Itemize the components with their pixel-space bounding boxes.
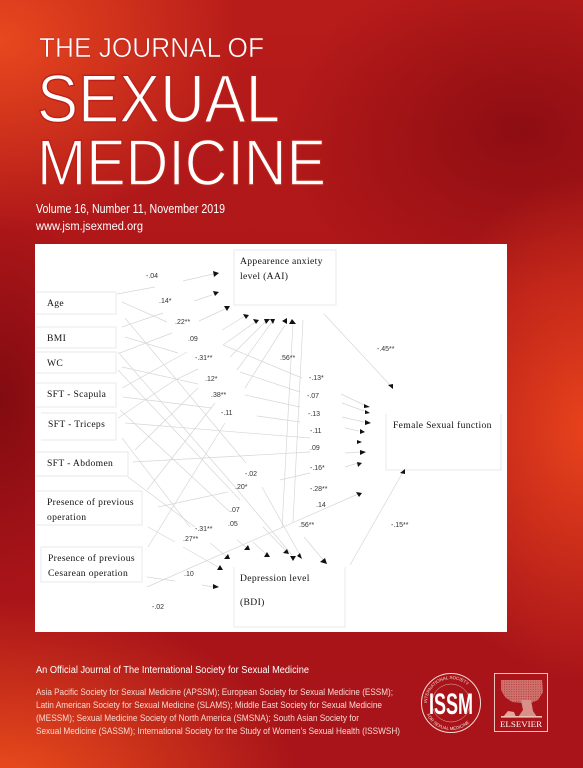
- box labels: WC: [47, 358, 63, 369]
- coefficients: [146, 273, 409, 611]
- coefficients: .12*: [205, 376, 218, 383]
- coefficients: -.16*: [310, 465, 325, 472]
- society affiliations: An Official Journal of The International Society for Sexual Medicine: [36, 665, 309, 676]
- coefficients: -.11: [310, 428, 322, 435]
- coefficients: .20*: [235, 484, 248, 491]
- box labels: SFT - Triceps: [48, 419, 105, 430]
- box labels: BMI: [47, 333, 66, 344]
- coefficients: .09: [188, 336, 198, 343]
- society affiliations: (MESSM); Sexual Medicine Society of North America (SMSNA); South Asian Society for: [36, 713, 359, 723]
- coefficients: .22**: [175, 319, 190, 326]
- coefficients: -.31**: [195, 355, 213, 362]
- box labels: SFT - Abdomen: [47, 458, 113, 469]
- coefficients: -.11: [221, 410, 233, 417]
- coefficients: -.04: [146, 273, 158, 280]
- masthead: journal title: [37, 32, 326, 199]
- coefficients: .27**: [183, 536, 198, 543]
- box labels: Presence of previous: [48, 553, 135, 564]
- coefficients: .07: [230, 507, 240, 514]
- coefficients: .09: [310, 445, 320, 452]
- coefficients: -.13: [308, 411, 320, 418]
- society affiliations: Asia Pacific Society for Sexual Medicine (APSSM); European Society for Sexual Medicine (ESSM);: [36, 687, 393, 697]
- issue details: [35, 202, 225, 233]
- coefficients: -.02: [245, 471, 257, 478]
- issue details: Volume 16, Number 11, November 2019: [36, 202, 225, 216]
- box labels: Depression level: [240, 573, 310, 584]
- coefficients: -.07: [307, 393, 319, 400]
- coefficients: -.31**: [195, 526, 213, 533]
- box labels: SFT - Scapula: [47, 389, 107, 400]
- coefficients: .14*: [159, 298, 172, 305]
- coefficients: .38**: [211, 392, 226, 399]
- coefficients: .14: [316, 502, 326, 509]
- coefficients: .05: [228, 521, 238, 528]
- logo: Elsevier: [494, 674, 548, 732]
- box labels: Cesarean operation: [48, 568, 128, 579]
- coefficients: -.45**: [377, 346, 395, 353]
- society affiliations: [36, 665, 400, 736]
- society affiliations: Latin American Society for Sexual Medicine (SLAMS); Middle East Society for Sexual Medicine: [36, 700, 382, 710]
- box labels: (BDI): [240, 597, 265, 608]
- icon: elsevier tree: [501, 680, 543, 718]
- box labels: level (AAI): [240, 271, 288, 282]
- logo: ISSM: INTERNATIONAL SOCIETY: [424, 676, 469, 703]
- box labels: [47, 256, 492, 608]
- box labels: Appearence anxiety: [240, 256, 323, 267]
- coefficients: -.15**: [391, 522, 409, 529]
- logo: ISSM: FOR SEXUAL MEDICINE: [426, 714, 470, 730]
- coefficients: .10: [184, 571, 194, 578]
- masthead: journal title: THE JOURNAL OF: [39, 32, 264, 63]
- box labels: Female Sexual function: [393, 420, 492, 431]
- coefficients: .56**: [280, 355, 295, 362]
- box labels: operation: [47, 512, 86, 523]
- issue details: www.jsm.jsexmed.org: [35, 221, 143, 233]
- society affiliations: Sexual Medicine (SASSM); International Society for the Study of Women’s Sexual Health (ISSWSH): [36, 726, 400, 736]
- logo: ISSM: ISSM: [429, 688, 473, 721]
- masthead: journal title: MEDICINE: [37, 126, 326, 199]
- coefficients: .56**: [299, 522, 314, 529]
- coefficients: -.28**: [310, 486, 328, 493]
- coefficients: -.13*: [309, 375, 324, 382]
- logo: ISSM: [421, 673, 481, 733]
- path lines: [117, 274, 403, 587]
- masthead: journal title: SEXUAL: [37, 61, 280, 137]
- box labels: Age: [47, 298, 64, 309]
- panel: path diagram: [35, 244, 507, 632]
- coefficients: -.02: [152, 604, 164, 611]
- variable boxes: [36, 250, 501, 627]
- logo: Elsevier: ELSEVIER: [500, 720, 542, 729]
- arrowheads: [213, 271, 405, 589]
- box labels: Presence of previous: [47, 497, 134, 508]
